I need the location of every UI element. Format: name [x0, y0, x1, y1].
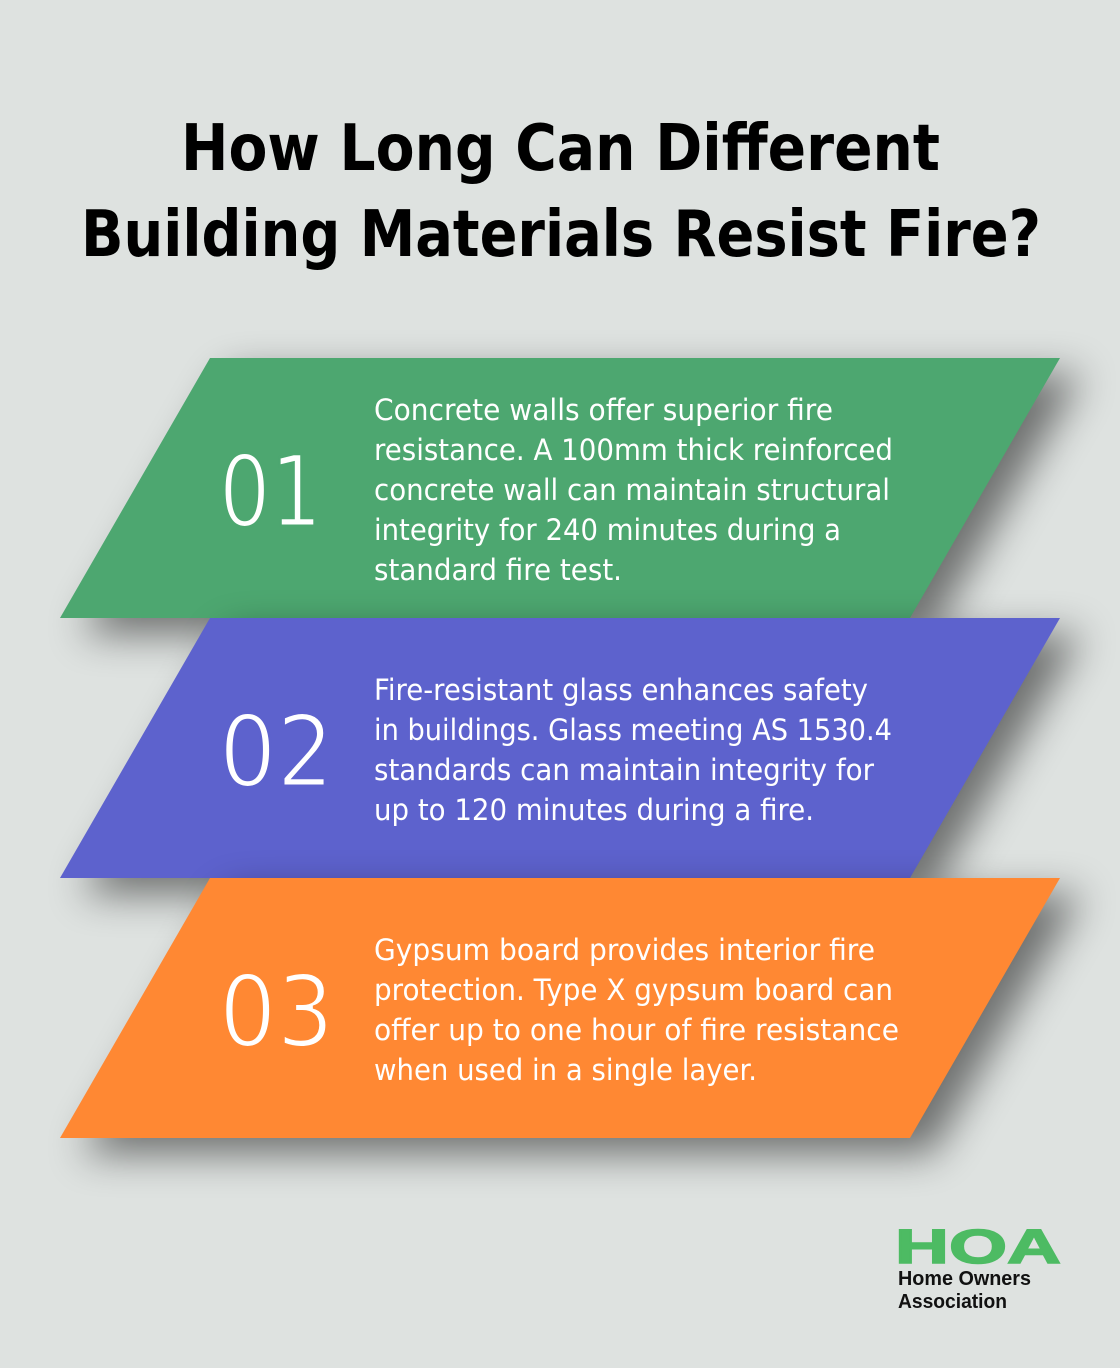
title [81, 112, 1041, 272]
text: gypsum board: protection. Type X gypsum board can [374, 973, 893, 1007]
text: fire-resistant glass [374, 673, 892, 827]
text: concrete walls: Concrete walls offer superior fire [374, 393, 833, 427]
text: fire-resistant glass: Fire-resistant glass enhances safety [374, 673, 868, 707]
text: concrete walls: standard fire test. [374, 553, 622, 587]
logo: HOA Home Owners Association: Association [898, 1291, 1007, 1313]
logo: HOA Home Owners Association: HOA [895, 1221, 1061, 1274]
panel: 01 concrete walls [60, 358, 1082, 634]
text: concrete walls [374, 393, 893, 587]
text: gypsum board: offer up to one hour of fire resistance [374, 1013, 899, 1047]
logo: HOA Home Owners Association: Home Owners [898, 1268, 1031, 1290]
text: concrete walls: concrete wall can maintain structural [374, 473, 890, 507]
number 01: 01 [219, 435, 322, 550]
panel: 03 gypsum board [60, 878, 1082, 1154]
logo: HOA Home Owners Association [895, 1221, 1061, 1313]
number 02: 02 [219, 695, 334, 810]
text: concrete walls: resistance. A 100mm thick reinforced [374, 433, 893, 467]
panel: 02 fire-resistant glass [60, 618, 1082, 894]
text: fire-resistant glass: up to 120 minutes during a fire. [374, 793, 814, 827]
text: gypsum board [374, 933, 899, 1087]
text: fire-resistant glass: standards can maintain integrity for [374, 753, 875, 787]
text: gypsum board: when used in a single layer. [374, 1053, 757, 1087]
number 03: 03 [219, 955, 334, 1070]
text: fire-resistant glass: in buildings. Glass meeting AS 1530.4 [374, 713, 892, 747]
text: gypsum board: Gypsum board provides interior fire [374, 933, 875, 967]
title: How Long Can Different [181, 112, 940, 186]
text: concrete walls: integrity for 240 minutes during a [374, 513, 841, 547]
